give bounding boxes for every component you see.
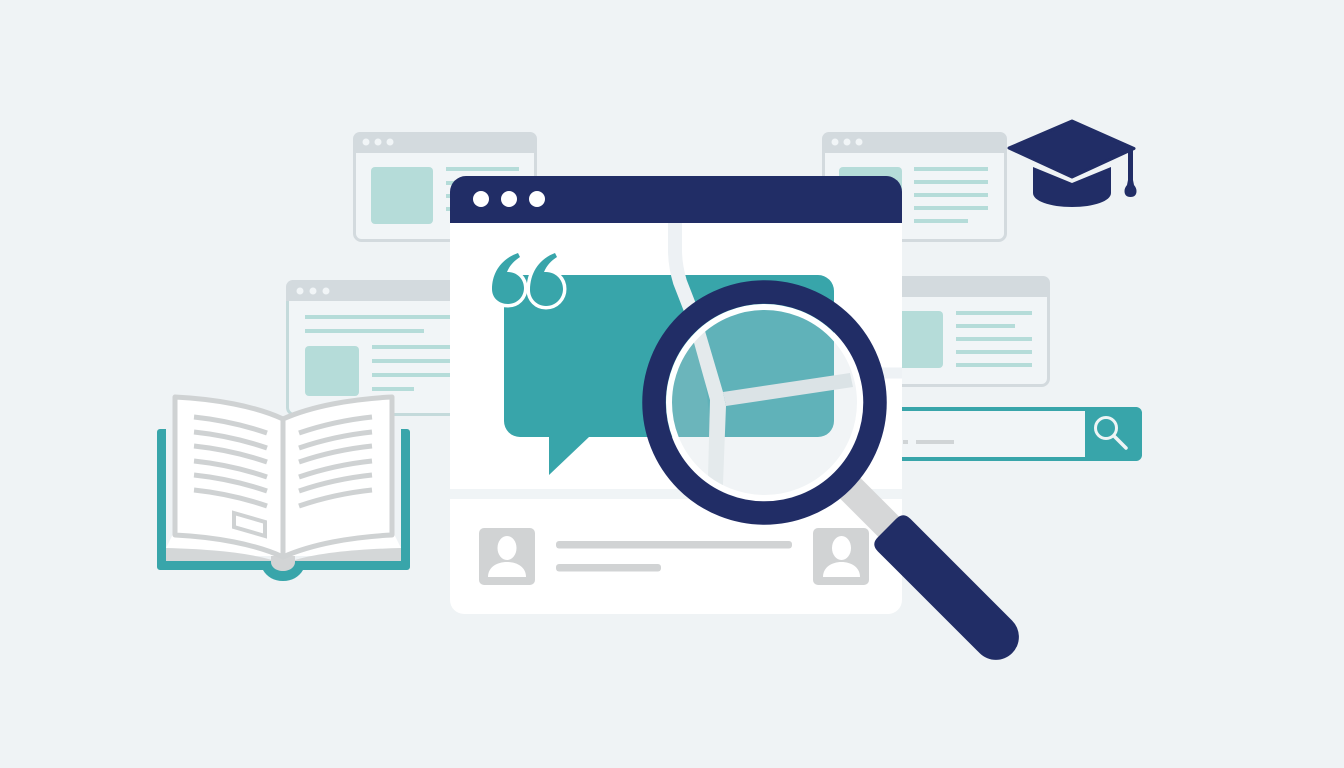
- right page: [283, 397, 392, 557]
- person icon left: [479, 528, 535, 585]
- panel: background browser window top right: [822, 132, 1007, 240]
- speech bubble: [504, 275, 834, 475]
- icon: open book: [157, 397, 410, 581]
- window control dots: [473, 191, 545, 207]
- page block: [166, 548, 401, 561]
- icon: opening quotation mark: [492, 253, 563, 306]
- window title bar: [450, 176, 902, 223]
- lens ring: [654, 292, 875, 513]
- placeholder comment line short: [556, 564, 661, 572]
- person icon right: [813, 528, 869, 585]
- white page edge: [166, 530, 401, 556]
- crack line upper: [675, 223, 694, 318]
- crack line right stub: [880, 368, 902, 378]
- book cover: [157, 429, 410, 581]
- lens rim: [669, 307, 860, 498]
- spine base: [271, 556, 295, 571]
- illustration: quotation under a magnifying glass: [157, 120, 1142, 660]
- magnifier handle: [871, 512, 1028, 669]
- magnifier neck: [845, 483, 890, 528]
- panel: background browser window top left: [353, 132, 537, 240]
- left page: [175, 397, 283, 557]
- divider band: [450, 489, 902, 499]
- panel: search bar: [860, 407, 1142, 461]
- panel: main browser window: [450, 176, 902, 614]
- icon: graduation cap: [1009, 121, 1136, 207]
- icon: search magnifier: [1096, 418, 1126, 448]
- icon: magnifying glass: [654, 275, 1028, 669]
- lens interior: [672, 310, 857, 489]
- right page text lines: [299, 417, 372, 506]
- panel: background browser window middle right: [860, 276, 1050, 386]
- panel: background browser window middle left: [286, 280, 490, 414]
- bookmark rectangle: [234, 513, 265, 536]
- left page text lines: [194, 417, 267, 506]
- search button: [1085, 407, 1142, 461]
- placeholder comment line long: [556, 541, 792, 548]
